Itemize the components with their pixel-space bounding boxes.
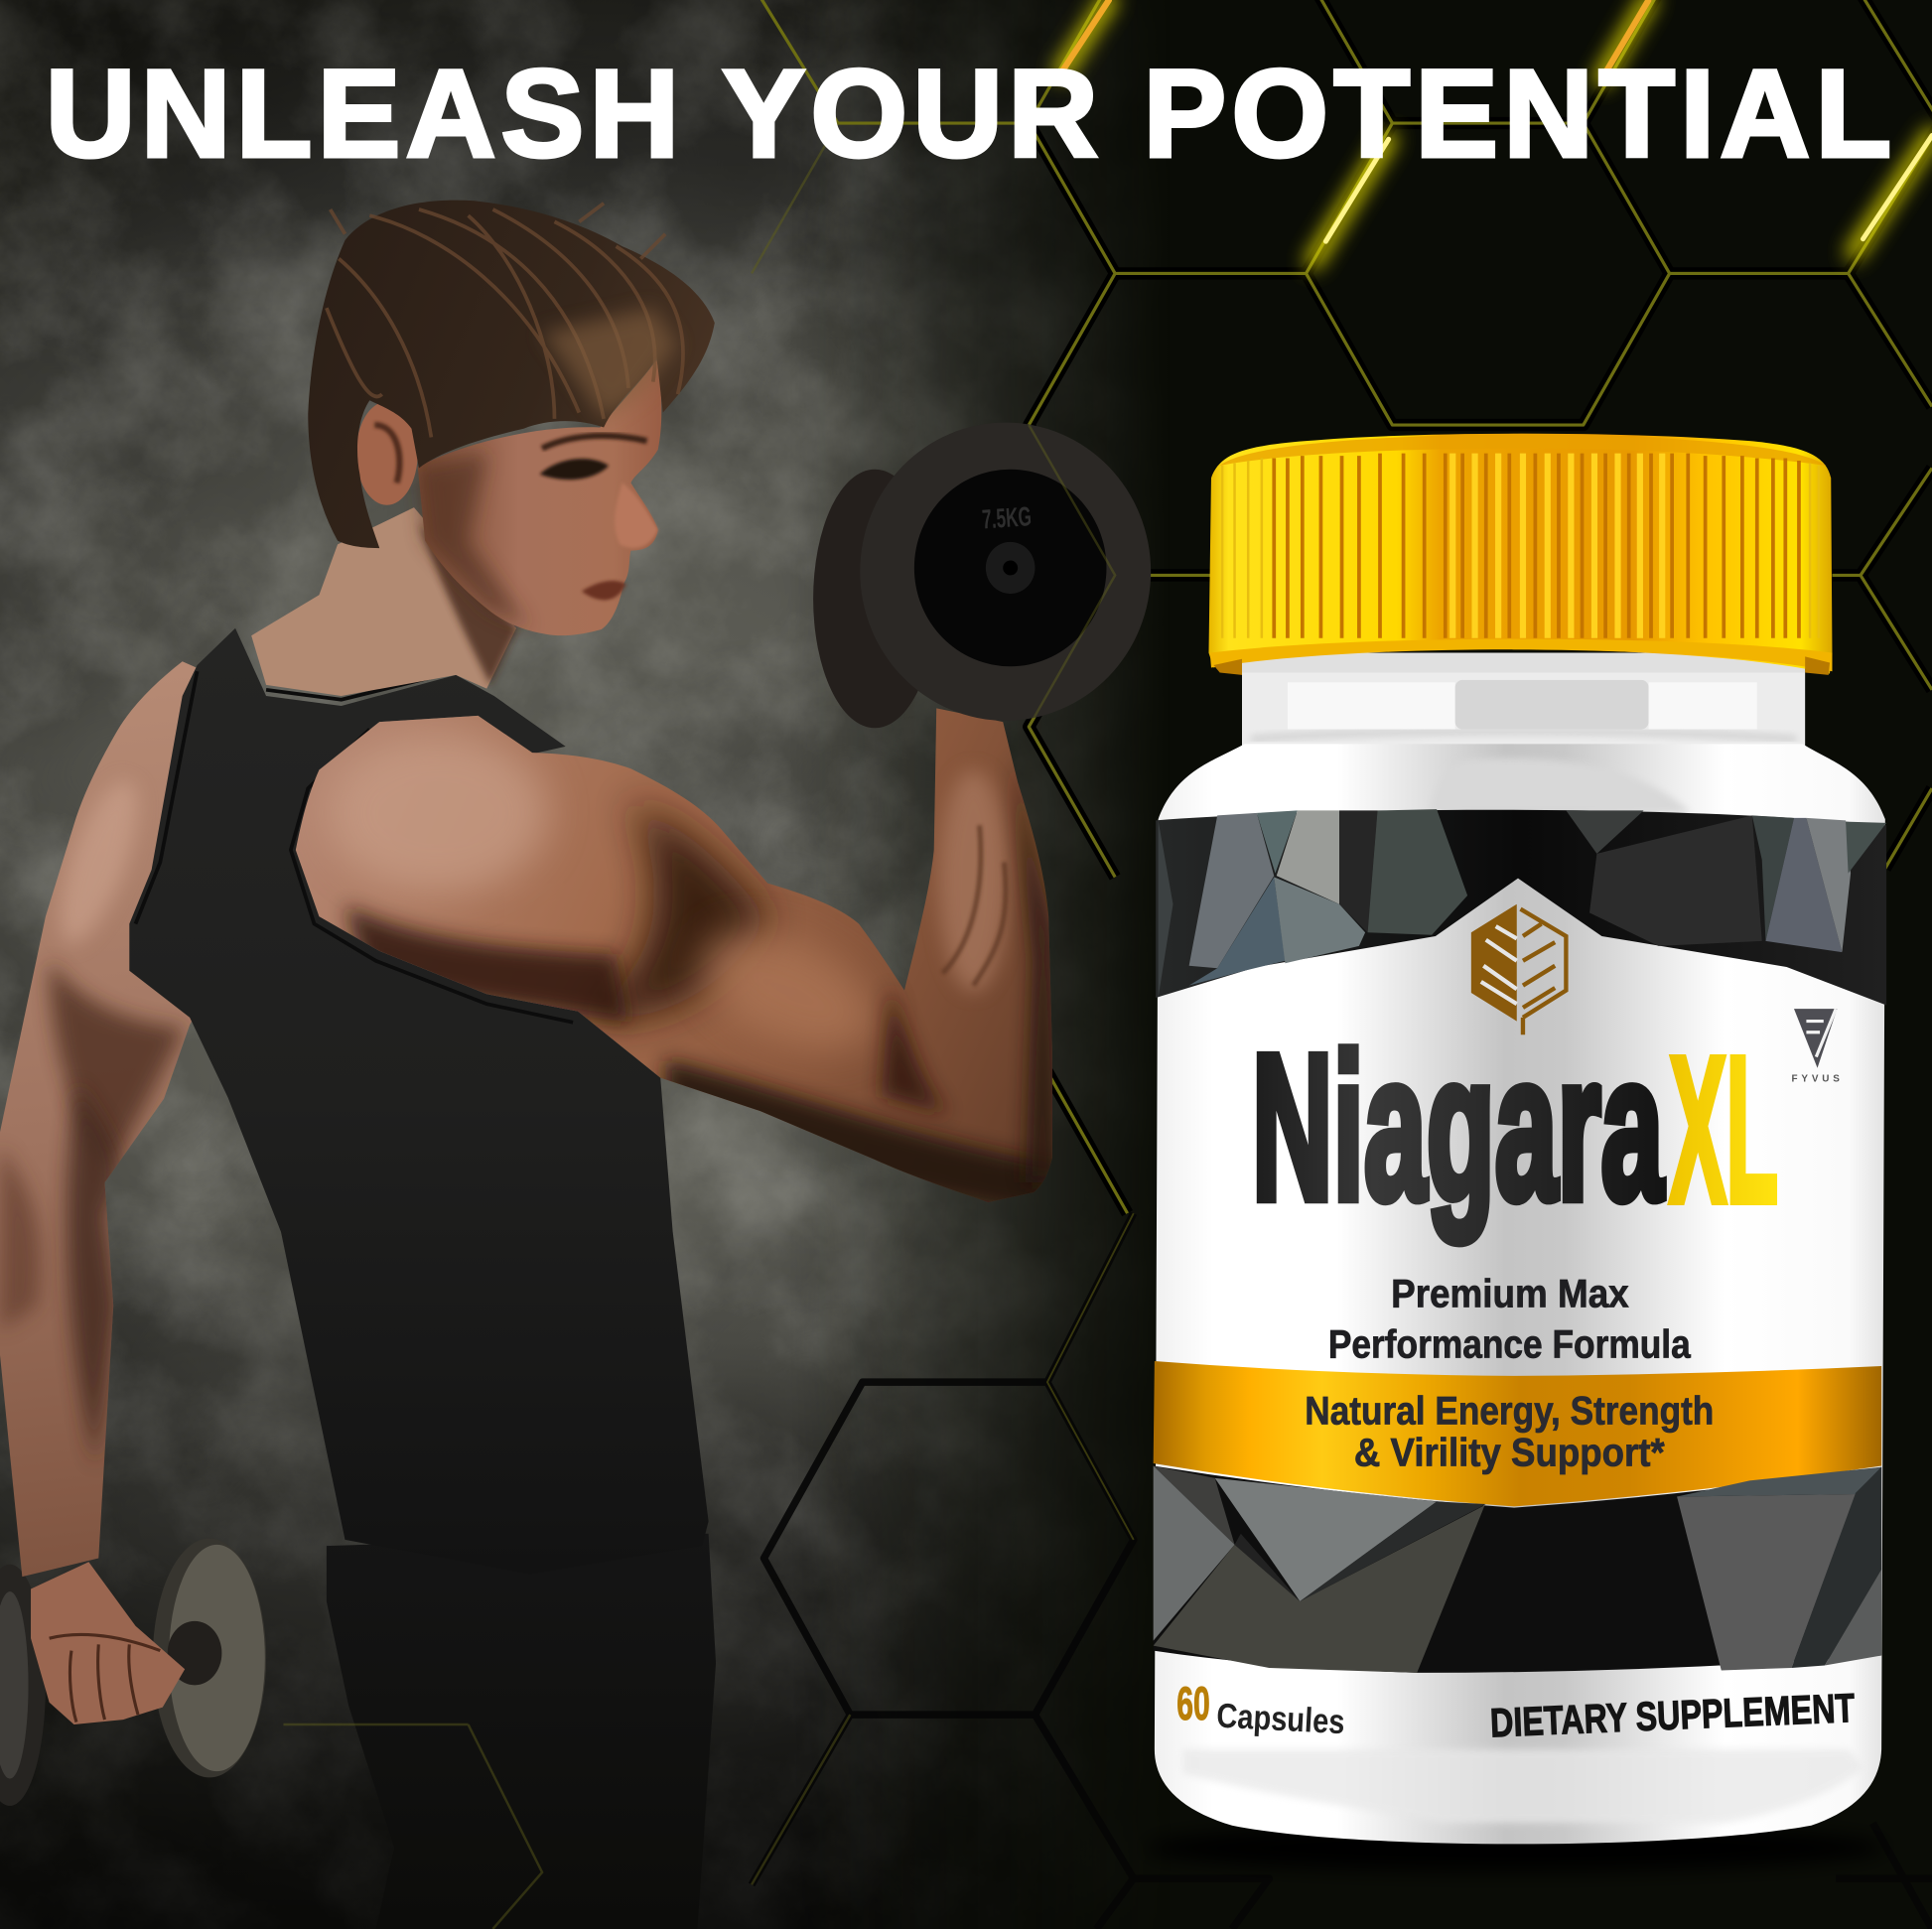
top label polygon art — [1156, 809, 1886, 1005]
man lifting dumbbells — [0, 201, 1151, 1929]
background: smoke wall — [0, 0, 1232, 1929]
capsule count — [1176, 1677, 1345, 1741]
bottle body — [1155, 744, 1885, 1844]
orange benefit band: & Virility Support* — [1354, 1431, 1665, 1474]
cap lower rim — [1210, 639, 1832, 671]
hair fringe highlight — [542, 308, 678, 419]
base highlight — [1182, 1749, 1863, 1823]
bottle shadow — [1146, 1823, 1885, 1872]
cap top rim — [1220, 434, 1826, 466]
leaf hexagon logo — [1471, 904, 1566, 1034]
face — [418, 359, 661, 635]
neck — [251, 507, 516, 696]
upper dumbbell — [813, 423, 1151, 728]
rear arm shading — [0, 772, 185, 1465]
tank top — [129, 628, 709, 1575]
orange benefit band: Natural Energy, Strength — [1305, 1389, 1714, 1433]
capsule count: Capsules — [1216, 1698, 1345, 1741]
cap corner tabs — [1213, 656, 1830, 675]
honeycomb grid lines — [746, 0, 1932, 1929]
neck ridge — [1251, 732, 1796, 739]
capsule count: 60 — [1176, 1677, 1210, 1729]
tagline: Performance Formula — [1328, 1322, 1692, 1366]
lower label polygon art — [1154, 1465, 1881, 1673]
title: UNLEASH YOUR POTENTIAL — [46, 45, 1891, 184]
arm muscle shading — [327, 733, 1059, 1219]
rear hand with fingers — [31, 1562, 185, 1724]
product bottle: XL — [1670, 1015, 1778, 1246]
hair — [308, 201, 715, 548]
glowing yellow hex edges — [1062, 0, 1932, 261]
rear arm — [0, 661, 246, 1577]
tank top binding seam — [136, 671, 573, 1023]
dumbbell weight marking: 7.5KG — [981, 500, 1033, 535]
golden cap — [1208, 434, 1832, 675]
facial features — [418, 436, 658, 628]
shorts — [327, 1534, 716, 1929]
product bottle — [1146, 434, 1886, 1872]
lower dumbbell: plates and handle — [0, 1539, 266, 1806]
main arm — [296, 708, 1052, 1202]
hair strands — [327, 204, 683, 437]
bottle neck — [1242, 653, 1805, 758]
tagline: Premium Max — [1391, 1272, 1629, 1315]
orange benefit band — [1154, 1361, 1881, 1506]
tagline — [1328, 1272, 1692, 1366]
cap ridges — [1222, 459, 1819, 638]
FYVUS logo: FYVUS — [1792, 1073, 1840, 1084]
ear — [356, 401, 418, 505]
shoulder shading — [1430, 758, 1691, 813]
faint hex lines over the dumbbell — [283, 425, 1115, 1929]
neck shadow — [419, 523, 517, 685]
FYVUS logo — [1792, 1009, 1840, 1084]
